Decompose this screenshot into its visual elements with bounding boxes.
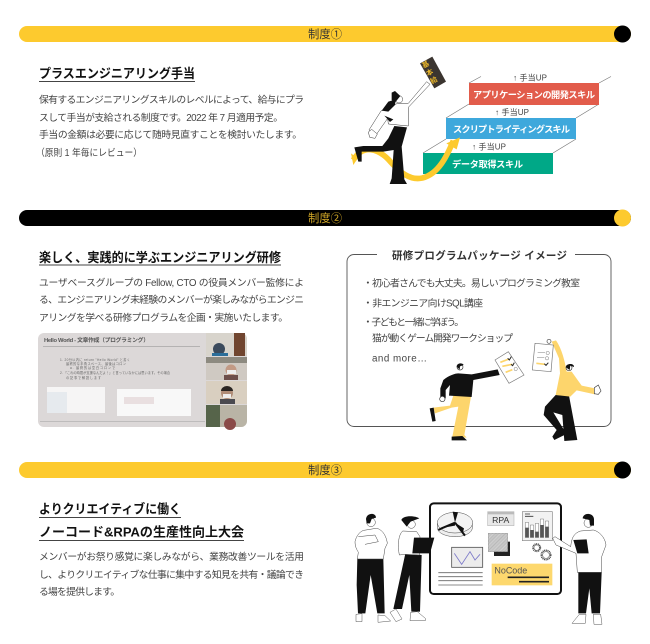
photo: online training screenshot bbox=[38, 333, 247, 430]
photo: online training screenshot: a. 最終的は空白コロンで bbox=[70, 365, 115, 370]
heading: ノーコード&RPAの生産性向上大会: ノーコード&RPAの生産性向上大会 bbox=[39, 524, 244, 540]
section bar: 制度③ bbox=[19, 462, 631, 478]
list item: 子ども bbox=[363, 316, 513, 344]
icon: gears bbox=[533, 544, 551, 560]
panel: 研修プログラムパッケージ イメージ bbox=[347, 249, 611, 426]
photo: online training screenshot: Hello World - 文章作成（プログラミング） bbox=[44, 336, 149, 344]
callout: NoCode: NoCode bbox=[494, 565, 527, 575]
plaque: 基本給: 本 bbox=[424, 67, 435, 78]
text block: allowance description bbox=[36, 93, 304, 159]
step: アプリケーションの開発スキル bbox=[469, 83, 599, 105]
section bar: 制度①: 制度① bbox=[308, 28, 342, 41]
photo: online training screenshot: 最終的な半角スペース、最後はコロン bbox=[66, 361, 126, 366]
text block: allowance description: 保有するエンジニアリングスキルのレベルによって、給与にプラ bbox=[39, 93, 304, 106]
step: アプリケーションの開発スキル: アプリケーションの開発スキル bbox=[473, 89, 595, 100]
plaque: 基本給: 基 bbox=[420, 59, 431, 70]
video tile 3 bbox=[206, 381, 247, 404]
list item: SQL: ・非エンジニア向けSQL講座 bbox=[363, 296, 483, 310]
video tile 1 bbox=[206, 333, 247, 356]
illustration: man thinking bbox=[355, 514, 391, 622]
text block: contest description: し、よりクリエイティブな仕事に集中する知見を共有・議論でき bbox=[39, 568, 304, 581]
label: 手当UP top: ↑ 手当UP bbox=[513, 72, 547, 82]
plaque: 基本給: 給 bbox=[429, 75, 439, 86]
illustration: woman with tablet bbox=[390, 516, 434, 622]
video tile 2 bbox=[206, 357, 247, 380]
label: RPA: RPA bbox=[492, 515, 509, 525]
text block: training description: アリングを学べる研修プログラムを企画・実施いたします。 bbox=[39, 311, 288, 324]
chart: line chart bbox=[452, 547, 483, 567]
panel title: 研修プログラムパッケージ イメージ bbox=[392, 249, 568, 262]
chart: bars bbox=[522, 512, 552, 541]
text block: training description bbox=[39, 276, 304, 324]
text block: contest description: メンバーがお祭り感覚に楽しみながら、業務改善ツールを活用 bbox=[39, 550, 304, 563]
video tile 4 bbox=[206, 405, 247, 430]
step: データ取得スキル bbox=[423, 153, 553, 174]
heading: 楽しく、実践的に学ぶエンジニアリング研修: 楽しく、実践的に学ぶエンジニアリング研修 bbox=[39, 250, 281, 265]
list item: 初心者: ・初心者さんでも大丈夫。易しいプログラミング教室 bbox=[363, 276, 580, 290]
step: スクリプトライティングスキル bbox=[446, 118, 576, 139]
label: 手当UP bottom: ↑ 手当UP bbox=[472, 142, 506, 152]
section bar: 制度②: 制度② bbox=[308, 212, 342, 225]
section bar: 制度② bbox=[19, 210, 631, 226]
illustration: man in yellow holding up checklist bbox=[532, 339, 601, 441]
icon: checklist bbox=[532, 339, 553, 372]
text block: training description: ユーザベースグループの Fellow, CTO の役員メンバー監修によ bbox=[39, 276, 304, 289]
step: データ取得スキル: データ取得スキル bbox=[452, 158, 523, 170]
plaque: 基本給 bbox=[420, 57, 446, 88]
text block: allowance description: 手当の金額は必要に応じて随時見直すことを検討いたします。 bbox=[39, 128, 302, 141]
section bar: 制度③: 制度③ bbox=[308, 464, 342, 477]
illustration: woman with 基本給 plaque and yellow arrow bbox=[351, 57, 460, 184]
photo: online training screenshot: の記事で解説します bbox=[66, 375, 101, 380]
photo: online training screenshot: 2. 「これの時間が支援なんだよ！」と言っていなかには思います。その場合 bbox=[60, 370, 171, 375]
list item: 子ども: ・子どもと一緒に学ぼう。 bbox=[363, 316, 464, 328]
text block: allowance description: （原則 1 年毎にレビュー） bbox=[36, 146, 142, 159]
list item: 子ども: 猫が動くゲーム開発ワークショップ bbox=[372, 332, 513, 344]
chart: skill staircase bbox=[423, 72, 611, 174]
text block: training description: る、エンジニアリング未経験のメンバーが楽しみながらエンジニ bbox=[39, 293, 304, 306]
text block: contest description bbox=[39, 550, 304, 598]
step: スクリプトライティングスキル: スクリプトライティングスキル bbox=[453, 124, 570, 134]
icon: checklist bbox=[495, 352, 524, 383]
icon: hatched square bbox=[488, 533, 510, 556]
list item: and more: and more… bbox=[372, 354, 427, 364]
heading: よりクリエイティブに働く: よりクリエイティブに働く bbox=[39, 502, 181, 516]
chart: 3D pie bbox=[437, 512, 473, 537]
photo: online training screenshot: 1. 20分以内に return "Hello World" と書く bbox=[60, 357, 130, 362]
illustration: presentation board bbox=[430, 503, 561, 594]
text block: contest description: る場を提供します。 bbox=[39, 585, 120, 598]
label: 手当UP middle: ↑ 手当UP bbox=[495, 107, 529, 117]
illustration: man in black running with checklist bbox=[430, 352, 524, 440]
section bar: 制度① bbox=[19, 26, 631, 42]
illustration: man presenting bbox=[553, 514, 606, 624]
arrow: yellow growth curve bbox=[351, 137, 460, 179]
heading: プラスエンジニアリング手当: プラスエンジニアリング手当 bbox=[39, 66, 195, 81]
text block: allowance description: スして手当が支給される制度です。2022 年 7 月適用予定。 bbox=[39, 111, 283, 124]
